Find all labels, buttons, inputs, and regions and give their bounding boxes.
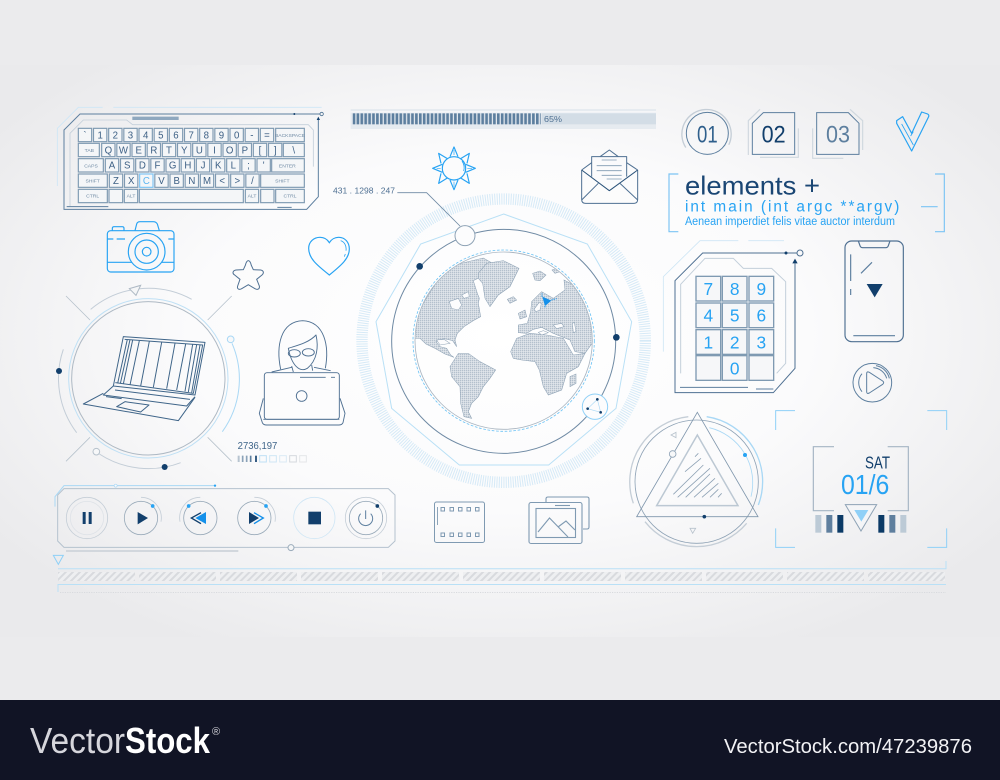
keyboard legends: N [188, 176, 195, 187]
keyboard legends: > [235, 176, 241, 187]
badge 03: 03 [826, 122, 850, 149]
keyboard legends: 5 [158, 130, 164, 141]
badge 02: 02 [762, 122, 786, 149]
keypad digits: 5 [730, 306, 739, 326]
keyboard panel [57, 107, 323, 209]
keyboard legends: ' [263, 161, 265, 172]
keyboard legends: E [135, 145, 142, 156]
keypad digits: 1 [704, 332, 713, 352]
keyboard legends: ] [274, 145, 277, 156]
keyboard legends: M [203, 176, 211, 187]
keypad digits: 2 [730, 332, 739, 352]
footer bar [0, 700, 1000, 780]
button: fast forward [238, 497, 275, 535]
keyboard legends: 3 [128, 130, 133, 141]
keyboard legends: CTRL [86, 194, 99, 200]
badge 03 [813, 109, 863, 158]
icon: envelope [582, 150, 638, 203]
badge 01: 01 [697, 121, 718, 148]
keyboard legends: P [242, 145, 248, 156]
keypad digits: 7 [704, 279, 713, 299]
keyboard legends: - [250, 130, 253, 141]
heading block: elements + [685, 170, 820, 200]
keyboard legends: O [226, 145, 234, 156]
keyboard legends: [ [259, 145, 262, 156]
button: pause [66, 497, 108, 539]
keyboard keys [78, 128, 304, 203]
keyboard legends: ENTER [279, 163, 296, 169]
date widget: SAT [865, 452, 890, 472]
keyboard legends: Z [113, 176, 119, 187]
hatched segments [58, 572, 945, 581]
date widget: 01/6 [841, 469, 889, 500]
button: rewind [180, 497, 217, 535]
keyboard legends: S [124, 161, 130, 172]
icon: laptop [83, 337, 205, 421]
date bars [815, 515, 906, 533]
keyboard legends: K [215, 161, 222, 172]
keyboard legends: U [196, 145, 203, 156]
button: power [345, 497, 387, 539]
icon: heart [309, 237, 349, 275]
brand logo: ® [212, 726, 220, 738]
badge 01 [675, 101, 740, 165]
keyboard legends [83, 130, 306, 200]
keyboard legends: SHIFT [85, 178, 100, 184]
keyboard legends: 1 [97, 130, 103, 141]
numeric keypad [663, 241, 803, 393]
keyboard legends: 6 [173, 130, 179, 141]
keyboard legends: CAPS [84, 163, 98, 169]
icon: film strip [434, 502, 484, 542]
counter text and level meter: 2736,197 [238, 441, 278, 452]
keypad digits [704, 279, 766, 378]
keyboard legends: G [169, 161, 176, 172]
keyboard legends: 8 [204, 130, 209, 141]
keyboard legends: W [119, 145, 129, 156]
progress bar [351, 109, 656, 129]
keyboard legends: C [143, 176, 150, 187]
keyboard legends: CTRL [283, 194, 297, 200]
keyboard legends: SHIFT [275, 178, 290, 184]
keyboard legends: Q [105, 145, 113, 156]
keyboard legends: Y [181, 145, 188, 156]
heading block: Aenean imperdiet felis vitae auctor interdum [685, 214, 895, 228]
keyboard legends: 4 [143, 130, 149, 141]
icon: pictures [529, 497, 589, 544]
badge 02 [748, 109, 798, 157]
icon: check mark [897, 112, 929, 151]
keypad digits: 3 [757, 332, 766, 352]
bottom timeline strip [58, 561, 946, 592]
keyboard legends: \ [292, 145, 295, 156]
keyboard legends: ; [247, 161, 250, 172]
icon: woman at laptop [259, 321, 345, 425]
brand logo [30, 720, 220, 761]
heading block [669, 170, 944, 232]
keyboard legends: X [128, 176, 135, 187]
keyboard legends: R [150, 145, 157, 156]
keyboard legends: I [213, 145, 216, 156]
keyboard legends: TAB [85, 148, 95, 154]
laptop gauge [56, 285, 239, 470]
icon: play button [853, 363, 892, 402]
numbered badges [675, 101, 929, 165]
keyboard legends: = [264, 130, 270, 141]
keyboard legends: B [173, 176, 180, 187]
map water holes [437, 292, 576, 345]
icon: smartphone [845, 241, 903, 342]
button: stop [294, 497, 335, 539]
media player panel [53, 484, 395, 564]
keyboard legends: BACKSPACE [275, 133, 306, 139]
keyboard legends: V [158, 176, 165, 187]
triangle target gauge [630, 412, 763, 547]
coordinates label: 431 . 1298 . 247 [333, 186, 395, 196]
globe radar [362, 193, 645, 482]
icon: sun [433, 147, 475, 190]
image id: VectorStock.com/47239876 [724, 736, 972, 758]
dotted world map [415, 258, 607, 418]
keypad digits: 0 [730, 358, 739, 378]
counter text and level meter [238, 441, 306, 462]
keyboard legends: 0 [234, 130, 239, 141]
keyboard legends: F [155, 161, 161, 172]
keyboard legends: H [184, 161, 191, 172]
icon: star [233, 261, 263, 289]
keyboard legends: ALT [248, 194, 256, 200]
brand logo: Vector [30, 720, 125, 761]
keyboard legends: 7 [188, 130, 194, 141]
brand logo: Stock [125, 720, 211, 761]
network node badge [582, 394, 608, 419]
keyboard legends: ALT [127, 194, 135, 200]
heading block: int main (int argc **argv) [685, 199, 899, 216]
keypad digits: 6 [757, 306, 766, 326]
icon: camera [107, 222, 174, 272]
button: play [124, 497, 161, 535]
keyboard legends: T [166, 145, 172, 156]
keyboard legends: L [231, 161, 237, 172]
keypad digits: 4 [704, 306, 714, 326]
date widget [776, 411, 947, 547]
keyboard legends: 2 [113, 130, 118, 141]
keyboard legends: A [109, 161, 116, 172]
keypad digits: 8 [730, 279, 739, 299]
keyboard legends: D [139, 161, 146, 172]
keyboard legends: ` [83, 130, 87, 141]
keypad digits: 9 [757, 279, 766, 299]
keyboard legends: / [251, 176, 254, 187]
keyboard legends: < [219, 176, 225, 187]
keypad keys [696, 276, 774, 380]
keyboard legends: J [201, 161, 206, 172]
keyboard legends: 9 [219, 130, 224, 141]
progress bar: 65% [544, 114, 563, 124]
